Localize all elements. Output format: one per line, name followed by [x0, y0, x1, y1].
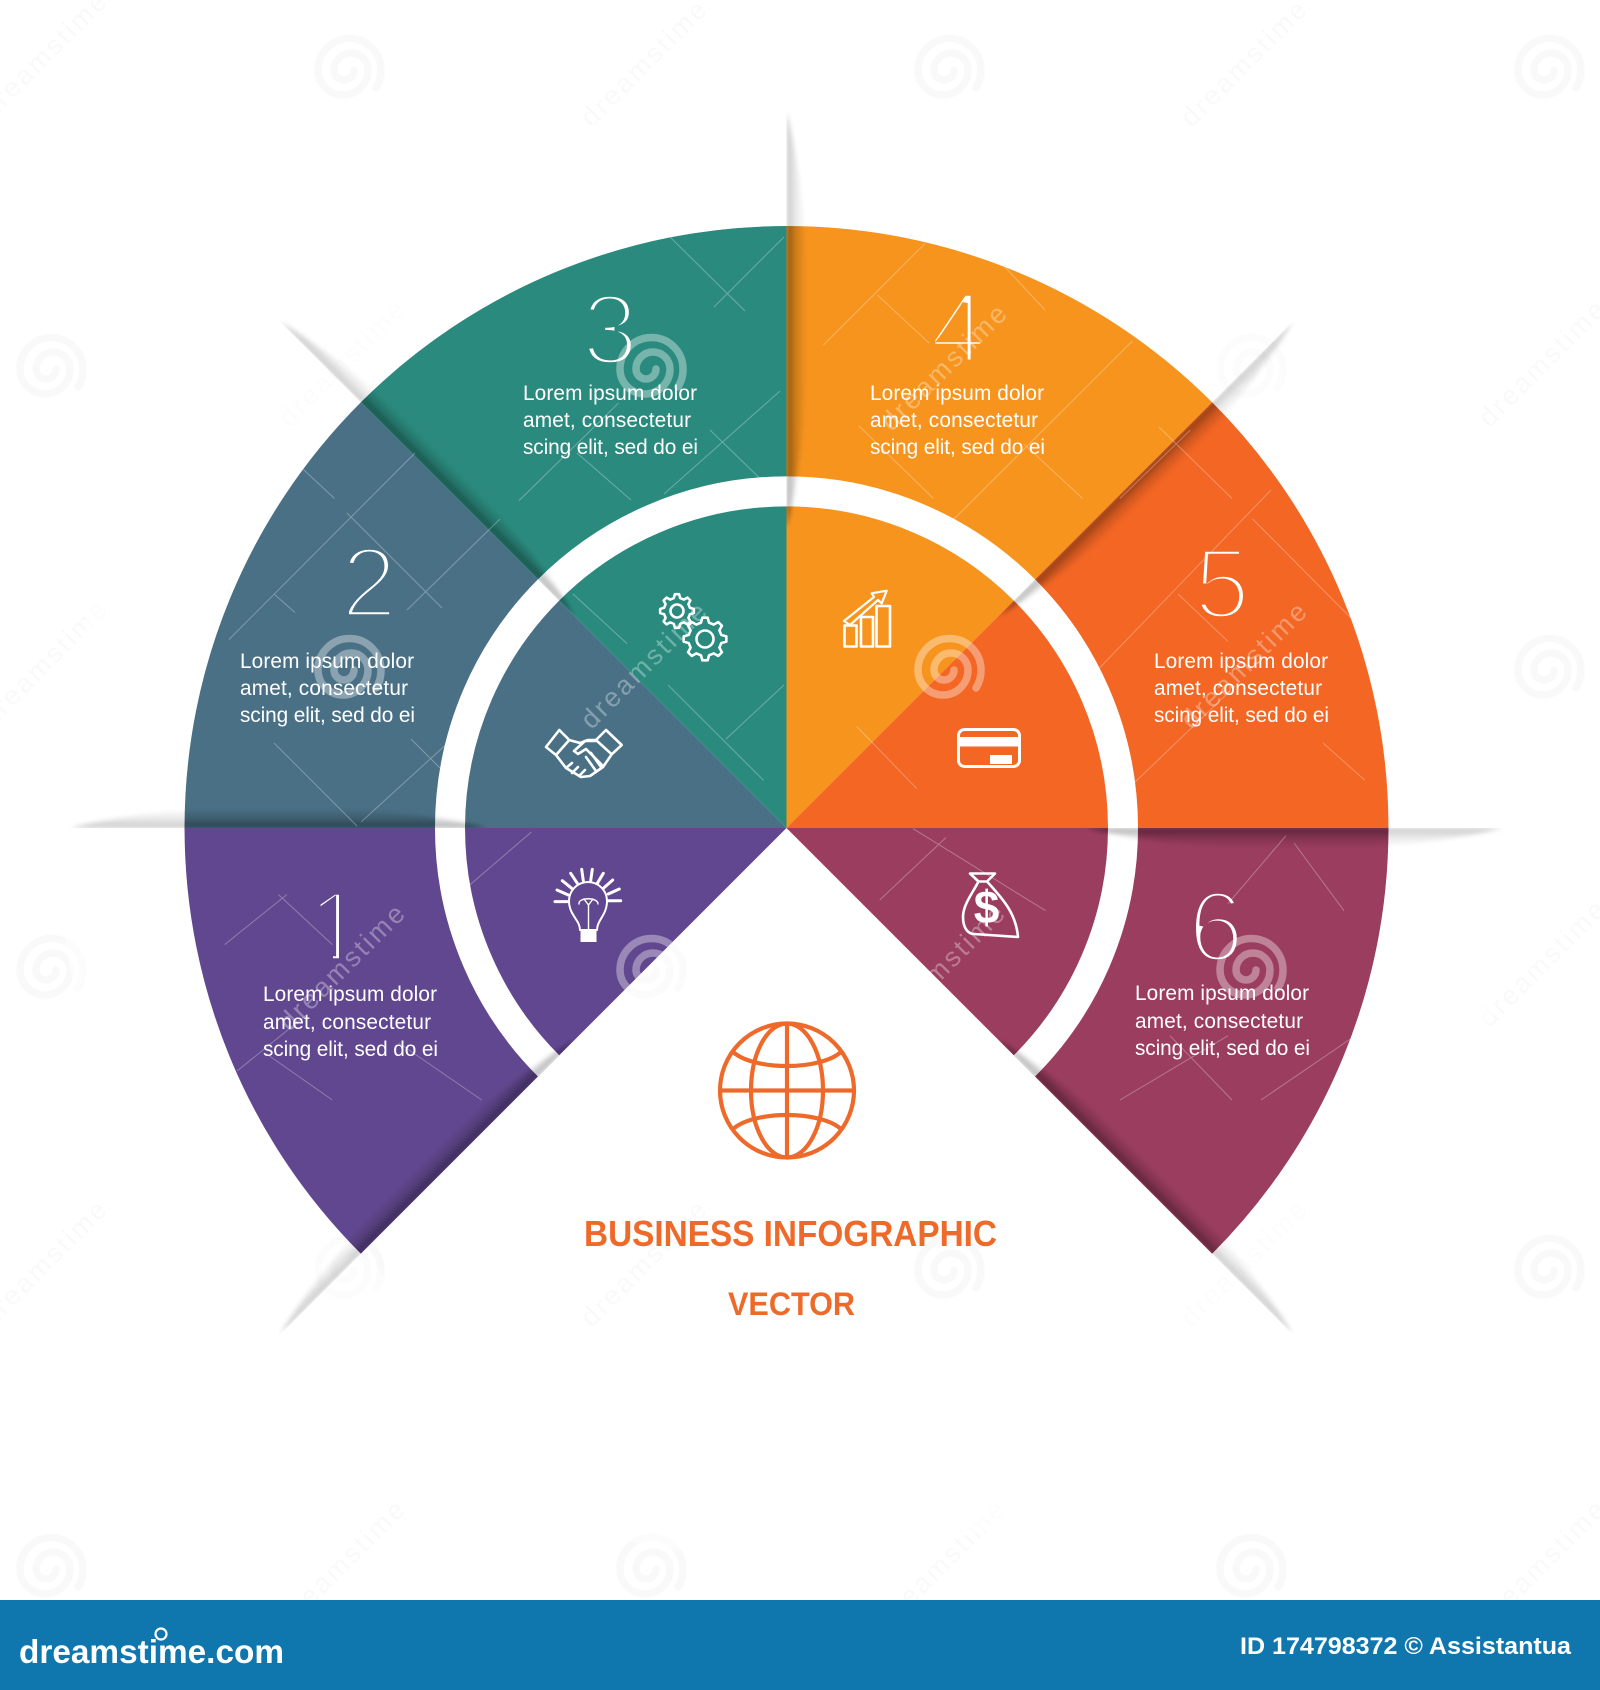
segment 5 orange — [786, 402, 1388, 828]
segment 4 amber — [786, 226, 1212, 828]
icon: light bulb — [555, 869, 621, 942]
text block segment 6: Lorem ipsum dolor — [1135, 982, 1309, 1005]
text block segment 1: Lorem ipsum dolor — [263, 983, 437, 1006]
text block segment 4: amet, consectetur — [870, 409, 1038, 432]
text block segment 5: scing elit, sed do ei — [1154, 704, 1329, 727]
icon: money bag: $ — [974, 881, 999, 933]
footer logo: dreamstime.com — [19, 1633, 284, 1670]
white inner ring — [450, 491, 1123, 1066]
text block segment 4: Lorem ipsum dolor — [870, 382, 1044, 405]
footer image id: ID 174798372 © Assistantua — [1240, 1633, 1572, 1660]
text block segment 2: Lorem ipsum dolor — [240, 650, 414, 673]
text block segment 6: amet, consectetur — [1135, 1010, 1303, 1033]
watermark overlay on colored segments: dreamstime — [575, 597, 713, 735]
segment 2 slate blue — [184, 402, 786, 828]
icon: credit card — [958, 730, 1020, 766]
number 1: 1 — [308, 871, 364, 983]
segment 1 purple — [184, 828, 786, 1254]
watermark overlay on colored segments: dreamstime — [273, 899, 411, 1037]
text block segment 3: Lorem ipsum dolor — [523, 382, 697, 405]
watermark overlay on colored segments: dreamstime — [1175, 597, 1313, 735]
text block segment 3: amet, consectetur — [523, 409, 691, 432]
text block segment 6: scing elit, sed do ei — [1135, 1037, 1310, 1060]
title: BUSINESS INFOGRAPHIC — [584, 1213, 997, 1254]
text block segment 5: Lorem ipsum dolor — [1154, 650, 1328, 673]
watermark on white background: dreamstime — [273, 1495, 411, 1633]
watermark overlay on colored segments: dreamstime — [875, 299, 1013, 437]
text block segment 2 — [240, 650, 415, 727]
watermark overlay on colored segments: dreamstime — [873, 899, 1011, 1037]
number 3: 3 — [582, 274, 638, 386]
watermark on white background: dreamstime — [575, 1195, 713, 1333]
text block segment 4 — [870, 382, 1045, 459]
number 4: 4 — [930, 272, 986, 384]
number 2: 2 — [341, 527, 397, 639]
watermark on white background: dreamstime — [273, 295, 411, 433]
icon: handshake — [546, 730, 622, 777]
icon: gears — [660, 594, 726, 660]
text block segment 1 — [263, 983, 438, 1061]
text block segment 5 — [1154, 650, 1329, 727]
footer bar — [0, 1600, 1600, 1690]
icon: money bag — [963, 874, 1018, 937]
number 5: 5 — [1194, 528, 1250, 640]
watermark on white background: dreamstime — [873, 1495, 1011, 1633]
watermark on white background: dreamstime — [1175, 1195, 1313, 1333]
text block segment 2: amet, consectetur — [240, 677, 408, 700]
number 6: 6 — [1188, 871, 1244, 983]
text block segment 3 — [523, 382, 698, 459]
text block segment 4: scing elit, sed do ei — [870, 436, 1045, 459]
segment 6 maroon — [786, 828, 1388, 1254]
text block segment 2: scing elit, sed do ei — [240, 704, 415, 727]
text block segment 1: amet, consectetur — [263, 1011, 431, 1034]
text block segment 6 — [1135, 982, 1310, 1060]
text block segment 1: scing elit, sed do ei — [263, 1038, 438, 1061]
icon: globe — [720, 1024, 854, 1158]
text block segment 3: scing elit, sed do ei — [523, 436, 698, 459]
watermark overlay on colored segments — [225, 237, 1365, 1100]
icon: growth chart — [844, 591, 890, 646]
subtitle: VECTOR — [728, 1286, 855, 1322]
text block segment 5: amet, consectetur — [1154, 677, 1322, 700]
segment 3 teal — [361, 226, 786, 828]
